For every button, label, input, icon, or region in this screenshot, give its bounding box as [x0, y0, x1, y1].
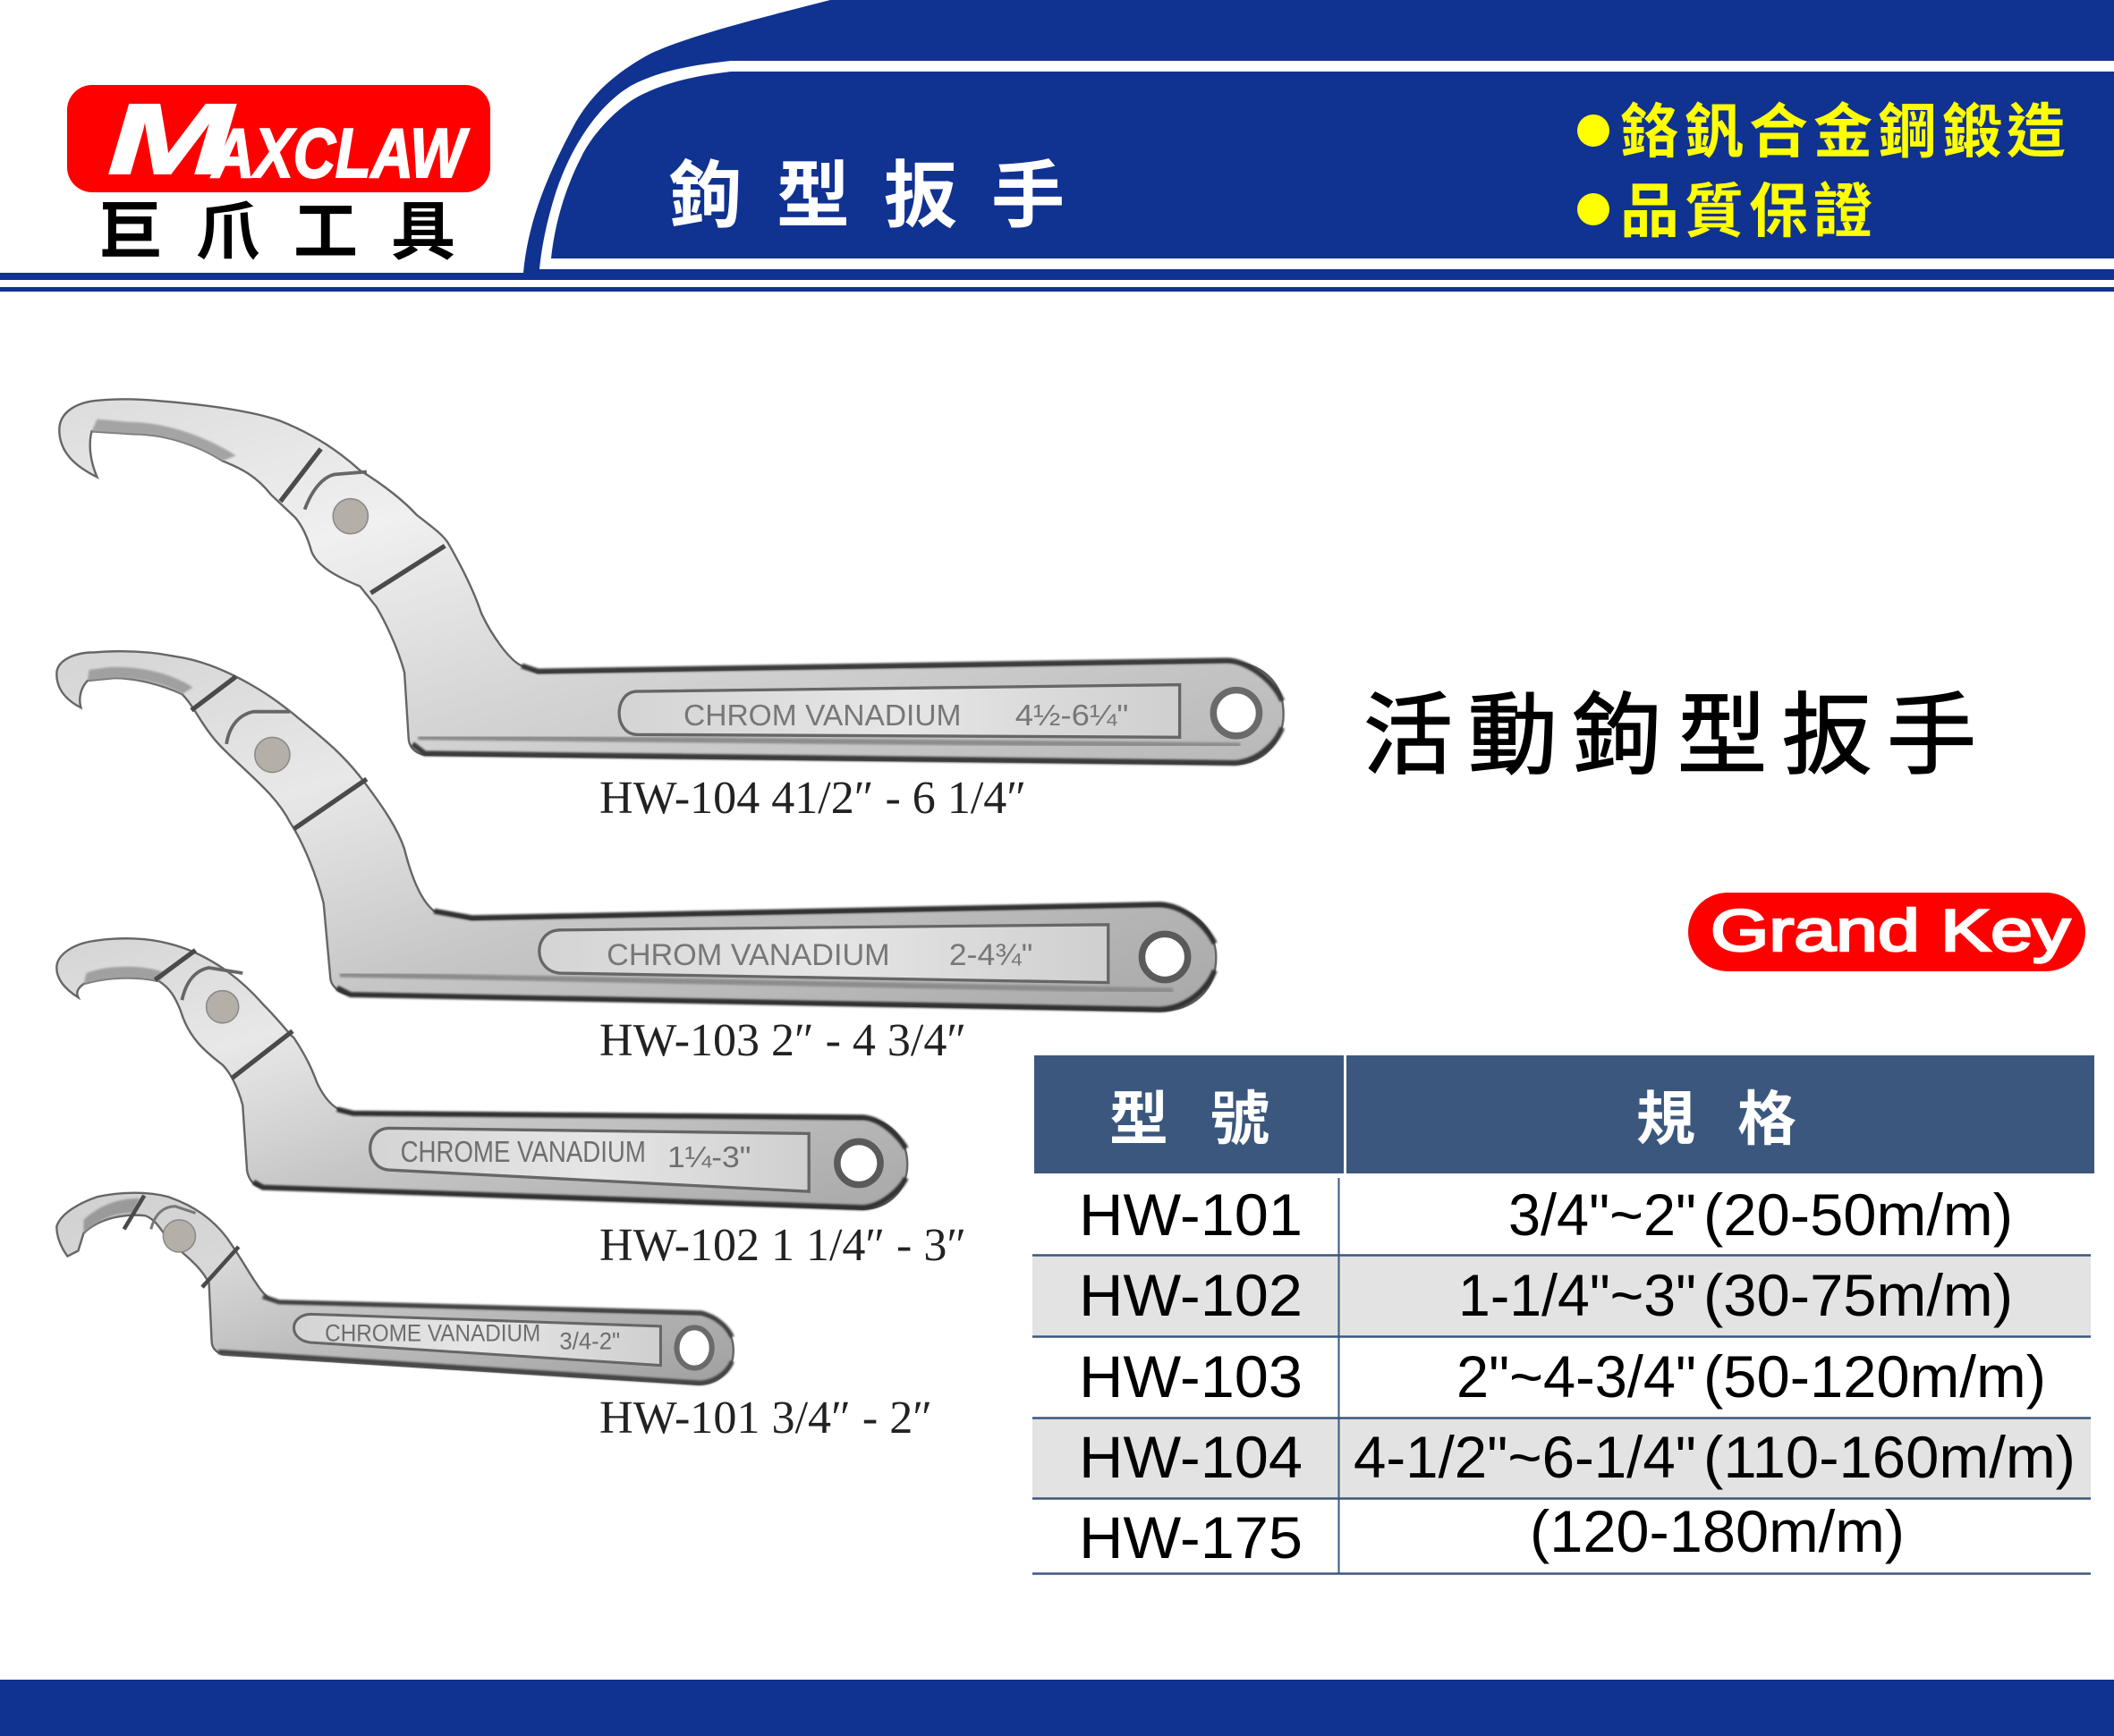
logo: Maxclaw: AXCLAW: [210, 114, 470, 192]
header title: 鉤型扳手: [669, 156, 1099, 237]
wrench HW-103: CHROM VANADIUM: [607, 938, 890, 972]
product title: 活動鉤型扳手: [1363, 686, 1991, 786]
wrench HW-104: [59, 399, 1284, 764]
header: blue banner: [0, 0, 2114, 292]
wrench HW-101: CHROME VANADIUM: [325, 1318, 540, 1346]
row HW-101: 3/4"~2": [1508, 1181, 1696, 1248]
label: HW-101: HW-101 3/4″ - 2″: [599, 1393, 932, 1444]
row HW-103: 2"~4-3/4": [1456, 1343, 1696, 1410]
logo caption: 巨爪工具: [98, 197, 488, 268]
row HW-102: [1079, 1262, 2013, 1328]
zebra rows: [1032, 1256, 2091, 1498]
wrench HW-104: 4½-6¼": [1015, 699, 1128, 733]
wrench HW-103: [56, 651, 1216, 1011]
row HW-103: (50-120m/m): [1703, 1343, 2046, 1410]
wrench HW-102: 1¼-3": [667, 1141, 751, 1174]
table header: [1034, 1055, 2094, 1173]
logo: Maxclaw: [67, 83, 490, 195]
row HW-175: (120-180m/m): [1530, 1498, 1905, 1564]
row HW-102: (30-75m/m): [1703, 1262, 2013, 1328]
label: HW-103: HW-103 2″ - 4 3/4″: [599, 1015, 966, 1066]
row HW-175: HW-175: [1079, 1504, 1303, 1571]
wrench HW-102: CHROME VANADIUM: [401, 1136, 646, 1169]
row HW-101: [1079, 1181, 2013, 1248]
row HW-104: [1079, 1424, 2076, 1490]
row HW-103: [1079, 1343, 2046, 1410]
footer bar: [0, 1680, 2114, 1736]
feature bullets: [1577, 98, 2071, 244]
wrench HW-102: [56, 938, 907, 1209]
feature bullets: 鉻釩合金鋼鍛造: [1620, 98, 2071, 165]
table header: 型號: [1109, 1086, 1312, 1152]
row HW-102: 1-1/4"~3": [1458, 1262, 1696, 1328]
row HW-101: HW-101: [1079, 1181, 1303, 1248]
row HW-102: HW-102: [1079, 1262, 1303, 1328]
row HW-104: (110-160m/m): [1703, 1424, 2076, 1490]
feature bullets: 品質保證: [1620, 178, 1878, 244]
logo: Grand Key: Grand Key: [1711, 897, 2070, 963]
row HW-175: [1079, 1498, 1905, 1571]
wrench HW-104: CHROM VANADIUM: [683, 699, 961, 733]
table: specifications: [1032, 1055, 2094, 1574]
wrench HW-103: 2-4¾": [949, 938, 1032, 972]
row HW-103: HW-103: [1079, 1343, 1303, 1410]
label: HW-102: HW-102 1 1/4″ - 3″: [599, 1220, 966, 1271]
label: HW-104: HW-104 41/2″ - 6 1/4″: [599, 773, 1026, 824]
wrench HW-101: [56, 1193, 734, 1385]
table header: 規格: [1636, 1086, 1838, 1152]
wrench HW-101: 3/4-2": [559, 1327, 620, 1355]
logo: Grand Key: [1688, 893, 2085, 971]
row HW-104: HW-104: [1079, 1424, 1303, 1490]
row HW-104: 4-1/2"~6-1/4": [1354, 1424, 1696, 1490]
logo: Maxclaw: M: [107, 83, 236, 195]
row HW-101: (20-50m/m): [1703, 1181, 2013, 1248]
